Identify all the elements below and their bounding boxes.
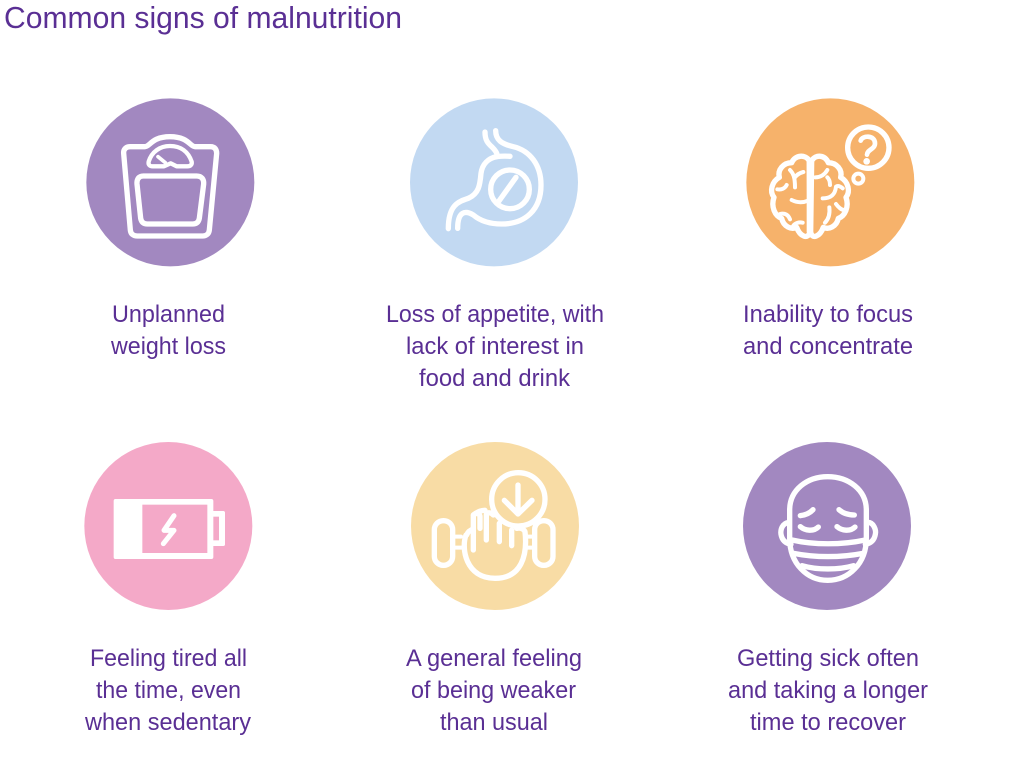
icon: low battery — [84, 442, 252, 610]
label: time to recover — [750, 709, 906, 736]
label: when sedentary — [84, 709, 251, 736]
icon: face with mask — [743, 442, 911, 610]
label: the time, even — [96, 677, 241, 704]
icon: hand gripping dumbbell with down arrow — [411, 442, 579, 610]
label: Feeling tired all — [90, 645, 247, 672]
panel: loss of appetite — [386, 98, 604, 392]
label: Unplanned — [112, 301, 225, 328]
label: lack of interest in — [406, 333, 584, 360]
label — [743, 301, 913, 360]
icon: weighing scale — [86, 98, 254, 266]
label: of being weaker — [411, 677, 576, 704]
label: Getting sick often — [737, 645, 919, 672]
label: Inability to focus — [743, 301, 913, 328]
label: and taking a longer — [728, 677, 928, 704]
panel: feeling tired — [84, 442, 252, 736]
label — [728, 645, 928, 736]
label: Loss of appetite, with — [386, 301, 604, 328]
label — [110, 301, 226, 360]
icon: stomach with no symbol — [410, 98, 578, 266]
title: Common signs of malnutrition — [4, 0, 402, 35]
icon: brain with question bubble — [746, 98, 914, 266]
label: A general feeling — [406, 645, 582, 672]
panel: getting sick — [728, 442, 928, 736]
label — [406, 645, 582, 736]
panel: inability to focus — [743, 98, 914, 360]
label — [84, 645, 251, 736]
label: and concentrate — [743, 333, 913, 360]
label: weight loss — [110, 333, 226, 360]
label: than usual — [440, 709, 548, 736]
panel: feeling weaker — [406, 442, 582, 736]
panel: unplanned weight loss — [86, 98, 254, 360]
label: food and drink — [419, 365, 571, 392]
label — [386, 301, 604, 392]
